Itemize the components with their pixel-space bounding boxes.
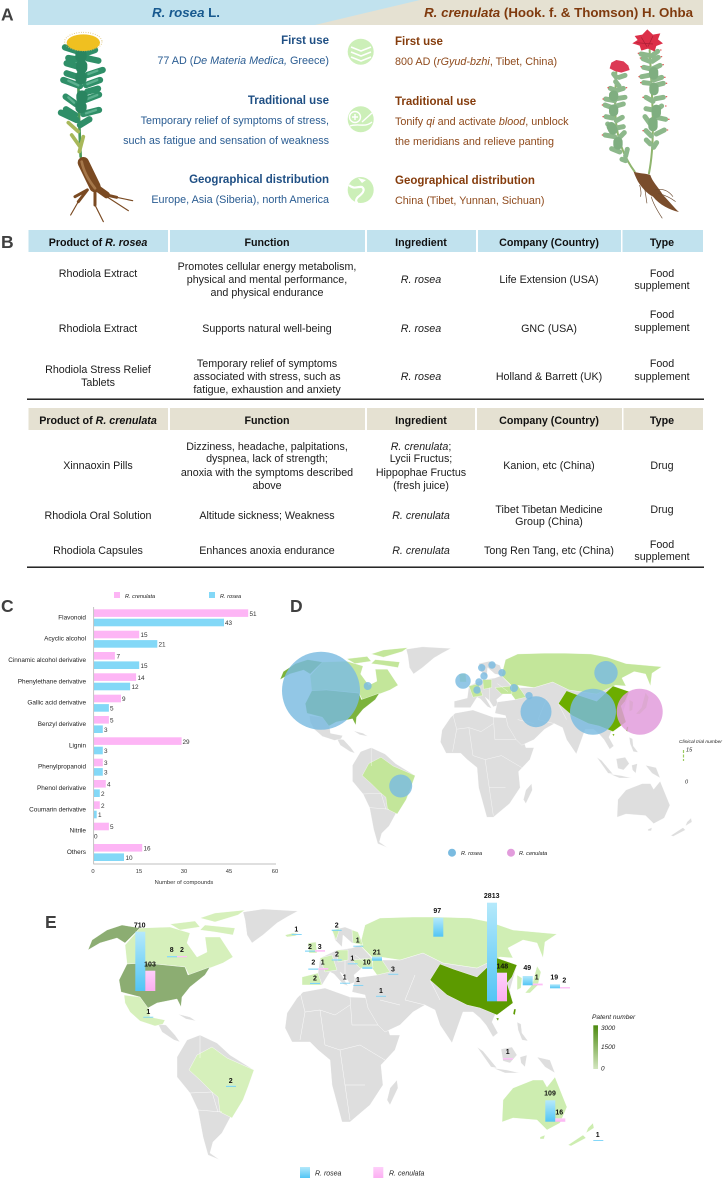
- table rows: R. crenulata products: anoxia with the symptoms described: [181, 467, 353, 479]
- patent bar values: 2: [311, 959, 315, 966]
- category labels: Benzyl derivative: [38, 721, 86, 728]
- banner: R. crenulata (Hook. f. & Thomson) H. Ohba: [424, 5, 694, 20]
- chart legend: R. crenulata: [125, 594, 155, 600]
- patent number legend: [592, 1014, 636, 1072]
- table rows: R. crenulata products: Hippophae Fructus: [376, 467, 466, 479]
- table rows: R. crenulata products: Rhodiola Capsules: [53, 545, 143, 557]
- category labels: Gallic acid derivative: [27, 700, 86, 707]
- table rows: R. crenulata products: Lycii Fructus;: [390, 453, 452, 465]
- table header: R. crenulata: Product of R. crenulata: [39, 415, 157, 427]
- patent bar values: 2: [313, 975, 317, 982]
- table rows: R. rosea products: supplement: [634, 280, 690, 292]
- table rows: R. rosea products: supplement: [634, 371, 690, 383]
- bar values: 5: [110, 718, 114, 724]
- table header: R. rosea: Type: [650, 237, 674, 249]
- bar values: [94, 611, 257, 862]
- text: R. rosea details: such as fatigue and sensation of weakness: [123, 135, 330, 147]
- patent bar values: 148: [496, 964, 508, 971]
- chart axes: [94, 607, 276, 864]
- patent bar values: 19: [550, 974, 558, 981]
- category labels: Lignin: [69, 742, 86, 749]
- panel A: species comparison: [1, 0, 703, 222]
- bar values: 43: [225, 620, 233, 627]
- patent bar values: 97: [433, 908, 441, 915]
- bar values: 1: [98, 812, 102, 819]
- bar values: 5: [110, 824, 114, 831]
- category labels: Coumarin derivative: [29, 806, 86, 813]
- patent bar values: 2: [335, 923, 339, 930]
- panel E: patent map: [45, 893, 636, 1178]
- bar values: 3: [104, 760, 108, 767]
- category labels: Cinnamic alcohol derivative: [8, 657, 86, 664]
- x axis ticks and title: 45: [226, 869, 232, 875]
- patent bar values: 1: [321, 959, 325, 966]
- bar values: 14: [138, 675, 145, 682]
- bar values: 2: [101, 791, 105, 798]
- panel label C: C: [1, 596, 14, 616]
- table rows: R. rosea products: associated with stress, such as: [193, 371, 341, 383]
- category labels: Phenol derivative: [37, 785, 86, 792]
- patent bar values: 1: [356, 977, 360, 984]
- table rows: R. rosea products: and physical endurance: [211, 287, 323, 299]
- patent bar values: 2: [180, 947, 184, 954]
- map legend clinical trial number: [679, 739, 722, 786]
- table rows: R. rosea products: Rhodiola Stress Relief: [45, 364, 151, 376]
- patent bar values: 1: [356, 937, 360, 944]
- patent bar values: 2813: [484, 893, 500, 900]
- table rows: R. rosea products: Rhodiola Extract: [59, 268, 137, 280]
- table rows: R. crenulata products: R. crenulata;: [391, 441, 451, 453]
- bar values: 15: [140, 632, 148, 639]
- banner: [28, 0, 703, 25]
- patent bar values: 21: [373, 950, 381, 957]
- patent bar values: 1: [146, 1009, 150, 1016]
- patent bar values: 3: [318, 944, 322, 951]
- table rows: R. rosea products: R. rosea: [401, 274, 441, 286]
- table rows: R. crenulata products: R. crenulata: [392, 545, 450, 557]
- bar values: 3: [104, 727, 108, 734]
- table rows: R. crenulata products: above: [252, 480, 282, 492]
- panel label A: A: [1, 4, 14, 24]
- map legend clinical trial number: 15: [686, 748, 693, 754]
- table rows: R. crenulata products: Drug: [650, 504, 674, 516]
- text: R. rosea details: Traditional use: [248, 95, 329, 107]
- map legend species: R. cenulata: [519, 851, 547, 857]
- panel D: clinical trial map: [280, 596, 722, 857]
- text: R. rosea details: Temporary relief of symptoms of stress,: [141, 115, 329, 127]
- x axis ticks and title: Number of compounds: [155, 880, 213, 886]
- patent bar values: 1: [294, 927, 298, 934]
- bar values: 9: [122, 696, 126, 703]
- table rows: R. crenulata products: (fresh juice): [393, 480, 449, 492]
- icon: medical care hand: [348, 106, 374, 132]
- table rows: R. crenulata products: Dizziness, headache, palpitations,: [186, 441, 348, 453]
- table rows: R. crenulata products: Rhodiola Oral Solution: [45, 510, 152, 522]
- species legend: [300, 1167, 425, 1178]
- table rows: R. rosea products: Food: [650, 309, 674, 321]
- bar values: 51: [250, 611, 257, 618]
- text: R. crenulata details: First use: [395, 36, 443, 48]
- table rows: R. rosea products: Supports natural well-being: [202, 323, 332, 335]
- text: R. rosea details: 77 AD (De Materia Medica, Greece): [157, 55, 329, 67]
- table rows: R. rosea products: Temporary relief of symptoms: [197, 358, 337, 370]
- patent number legend: 0: [601, 1066, 605, 1072]
- patent bar values: 1: [596, 1132, 600, 1139]
- chart legend: R. rosea: [220, 594, 241, 600]
- category labels: Phenylethane derivative: [18, 678, 86, 685]
- icon: globe: [348, 177, 374, 203]
- world map: [88, 909, 594, 1160]
- text: R. rosea details: Geographical distribution: [189, 174, 329, 186]
- table rows: R. rosea products: fatigue, exhaustion and anxiety: [193, 384, 341, 396]
- category labels: Flavonoid: [58, 614, 86, 621]
- panel B: product table: [1, 230, 704, 568]
- text: R. crenulata details: 800 AD (rGyud-bzhi, Tibet, China): [395, 56, 557, 68]
- table rows: R. crenulata products: Altitude sickness; Weakness: [199, 510, 335, 522]
- map legend species: [448, 849, 547, 857]
- category labels: Nitrile: [70, 828, 86, 835]
- map legend clinical trial number: 0: [685, 780, 689, 786]
- map legend clinical trial number: Clinical trial number: [679, 739, 722, 745]
- patent bar values: 109: [544, 1091, 556, 1098]
- chart legend: [114, 592, 241, 600]
- patent number legend: Patent number: [592, 1014, 636, 1021]
- category labels: Others: [67, 849, 86, 856]
- text: R. crenulata details: [395, 36, 569, 207]
- bar values: 3: [104, 748, 108, 755]
- patent number legend: 1500: [601, 1044, 616, 1051]
- text: R. rosea details: [123, 35, 330, 206]
- table rows: R. rosea products: Tablets: [81, 377, 115, 389]
- table rows: R. crenulata products: R. crenulata: [392, 510, 450, 522]
- x axis ticks and title: 0: [91, 869, 95, 875]
- bar values: 7: [116, 654, 120, 660]
- table rows: R. crenulata products: Kanion, etc (China): [503, 460, 595, 472]
- patent bar values: 3: [391, 967, 395, 974]
- bar values: 21: [158, 642, 166, 649]
- bar values: 16: [144, 846, 151, 852]
- patent bar values: 1: [535, 975, 539, 982]
- illustration: R. crenulata plant: [602, 29, 679, 218]
- bubbles R. rosea: [282, 652, 618, 798]
- table header: R. rosea: Company (Country): [499, 237, 599, 249]
- table rows: R. crenulata products: [45, 441, 690, 563]
- table rows: R. crenulata products: Group (China): [515, 516, 583, 528]
- table rows: R. rosea products: R. rosea: [401, 323, 441, 335]
- icon: stacked layers: [348, 39, 374, 65]
- bar values: 12: [132, 684, 139, 691]
- table rows: R. rosea products: Promotes cellular energy metabolism,: [178, 261, 356, 273]
- table rows: R. crenulata products: Xinnaoxin Pills: [63, 460, 133, 472]
- patent bar values: 2: [562, 978, 566, 985]
- bar values: 4: [107, 782, 111, 788]
- panel C: compounds bar chart: [1, 592, 278, 886]
- bar values: 15: [140, 663, 148, 670]
- text: R. rosea details: First use: [281, 35, 329, 47]
- map legend species: R. rosea: [461, 851, 482, 857]
- x axis ticks and title: 15: [136, 869, 142, 875]
- bar values: 5: [110, 706, 114, 713]
- bars R. crenulata: [94, 609, 248, 852]
- banner: R. rosea L.: [152, 5, 220, 20]
- bar values: 29: [182, 739, 190, 746]
- table header: R. rosea: Function: [244, 237, 290, 249]
- table rows: R. crenulata products: dyspnea, lack of strength;: [206, 453, 328, 465]
- illustration: R. rosea plant: [61, 32, 133, 222]
- x axis ticks and title: [91, 869, 278, 886]
- species legend: R. rosea: [315, 1171, 342, 1178]
- text: R. crenulata details: Tonify qi and activate blood, unblock: [395, 116, 569, 128]
- patent number legend: 3000: [601, 1025, 616, 1032]
- category labels: Acyclic alcohol: [44, 636, 86, 643]
- table header: R. crenulata: Function: [244, 415, 290, 427]
- bubble R. crenulata: [617, 689, 663, 735]
- table rows: R. crenulata products: supplement: [634, 551, 690, 563]
- patent bar values: [134, 893, 600, 1139]
- table header: R. crenulata: [28, 408, 703, 430]
- patent bar values: 1: [350, 956, 354, 963]
- category labels: [8, 614, 86, 856]
- table rows: R. rosea products: Rhodiola Extract: [59, 323, 137, 335]
- table rows: R. rosea products: R. rosea: [401, 371, 441, 383]
- panel label B: B: [1, 232, 14, 252]
- patent bar values: 49: [523, 965, 531, 972]
- table rows: R. crenulata products: Food: [650, 539, 674, 551]
- table rows: R. crenulata products: Tibet Tibetan Medicine: [495, 504, 603, 516]
- patent bar values: 8: [170, 947, 174, 954]
- table header: R. crenulata: Type: [650, 415, 674, 427]
- panel label E: E: [45, 912, 57, 932]
- text: R. crenulata details: Traditional use: [395, 96, 476, 108]
- table header: R. rosea: Ingredient: [395, 237, 447, 249]
- patent bar values: 10: [363, 960, 371, 967]
- bar values: 3: [104, 770, 108, 777]
- table rows: R. rosea products: Food: [650, 268, 674, 280]
- table rows: R. rosea products: Food: [650, 358, 674, 370]
- x axis ticks and title: 60: [272, 869, 278, 875]
- world map: [280, 647, 692, 848]
- text: R. rosea details: Europe, Asia (Siberia), north America: [151, 194, 329, 206]
- patent bar values: 16: [555, 1109, 563, 1116]
- patent bars R. rosea: [135, 903, 603, 1141]
- table rows: R. crenulata products: Drug: [650, 460, 674, 472]
- table rows: R. rosea products: [45, 261, 690, 396]
- patent bar values: 103: [144, 962, 156, 969]
- table rows: R. crenulata products: Tong Ren Tang, etc (China): [484, 545, 614, 557]
- patent bar values: 2: [335, 951, 339, 958]
- table rows: R. crenulata products: Enhances anoxia endurance: [199, 545, 335, 557]
- bar values: 10: [126, 855, 133, 862]
- table header: R. rosea: Product of R. rosea: [49, 237, 147, 249]
- patent bars R. crenulata: [145, 950, 570, 1122]
- table rows: R. rosea products: Life Extension (USA): [499, 274, 599, 286]
- patent bar values: 710: [134, 923, 146, 930]
- panel label D: D: [290, 596, 303, 616]
- table header: R. crenulata: Company (Country): [499, 415, 599, 427]
- category labels: Phenylpropanoid: [38, 764, 86, 771]
- text: R. crenulata details: Geographical distribution: [395, 175, 535, 187]
- patent bar values: 1: [379, 988, 383, 995]
- table rows: R. rosea products: GNC (USA): [521, 323, 577, 335]
- bars R. rosea: [94, 619, 224, 861]
- table header: R. crenulata: Ingredient: [395, 415, 447, 427]
- x axis ticks and title: 30: [181, 869, 187, 875]
- table rows: R. rosea products: supplement: [634, 322, 690, 334]
- bar values: 0: [94, 834, 98, 841]
- patent bar values: 1: [506, 1049, 510, 1056]
- patent bar values: 2: [308, 944, 312, 951]
- patent bar values: 2: [229, 1078, 233, 1085]
- patent bar values: 1: [343, 975, 347, 982]
- table header: R. rosea: [28, 230, 703, 252]
- text: R. crenulata details: China (Tibet, Yunnan, Sichuan): [395, 195, 544, 207]
- table rows: R. rosea products: Holland & Barrett (UK): [496, 371, 602, 383]
- text: R. crenulata details: the meridians and relieve panting: [395, 136, 554, 148]
- table rows: R. rosea products: physical and mental performance,: [187, 274, 347, 286]
- species legend: R. cenulata: [389, 1171, 425, 1178]
- bar values: 2: [101, 803, 105, 810]
